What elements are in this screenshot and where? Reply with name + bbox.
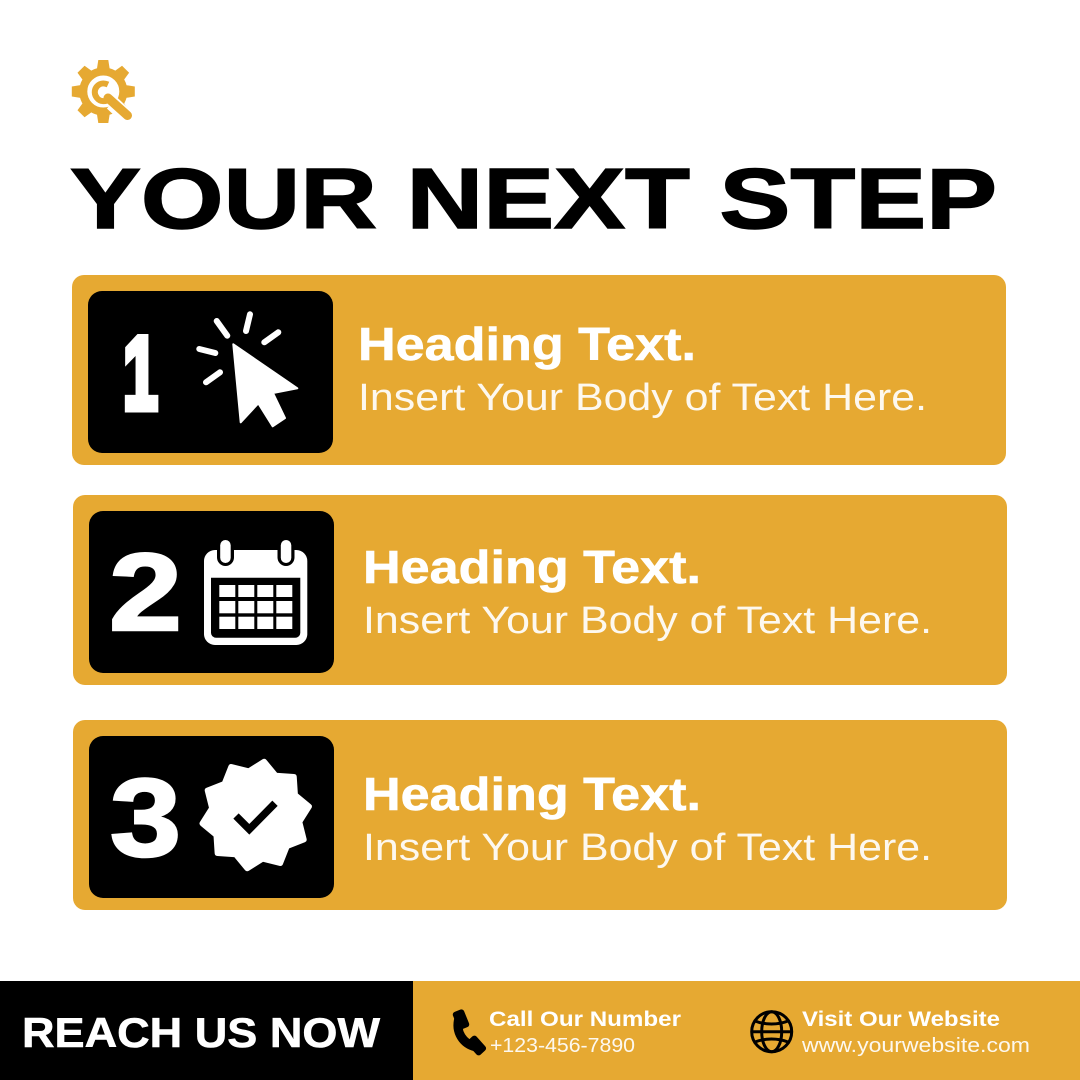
step 1 number: 1	[123, 316, 158, 432]
icon: mouse cursor click	[199, 314, 297, 426]
step 3 heading: Heading Text.	[363, 768, 701, 820]
step 3 body: Insert Your Body of Text Here.	[363, 827, 932, 869]
footer bar	[0, 981, 1080, 1080]
contact: phone: Call Our Number	[489, 1007, 682, 1031]
title: YOUR NEXT STEP	[70, 152, 997, 247]
icon: calendar	[204, 537, 307, 645]
step 1 number tile	[88, 291, 333, 453]
contact: phone	[489, 1007, 682, 1057]
icon: gear with wrench	[72, 60, 135, 123]
step 2 body: Insert Your Body of Text Here.	[363, 600, 932, 642]
step 2 heading: Heading Text.	[363, 541, 701, 593]
contact: website: www.yourwebsite.com	[801, 1034, 1030, 1057]
step 3 number: 3	[110, 757, 181, 880]
panel: step 2	[73, 495, 1007, 685]
icon: globe	[752, 1012, 792, 1052]
step 2 number: 2	[109, 531, 182, 654]
panel: step 3	[73, 720, 1007, 910]
step 3 number tile	[89, 736, 334, 898]
footer call to action	[0, 981, 413, 1080]
step 2 number tile	[89, 511, 334, 673]
contact: website	[801, 1007, 1030, 1057]
step 1 body: Insert Your Body of Text Here.	[358, 377, 927, 419]
icon: verified badge	[202, 762, 309, 868]
icon: telephone	[452, 1008, 487, 1057]
step 1 heading: Heading Text.	[358, 318, 696, 370]
panel: step 1	[72, 275, 1006, 465]
contact: phone: +123-456-7890	[490, 1034, 635, 1057]
footer call to action: REACH US NOW	[22, 1009, 380, 1056]
contact: website: Visit Our Website	[802, 1007, 1000, 1031]
